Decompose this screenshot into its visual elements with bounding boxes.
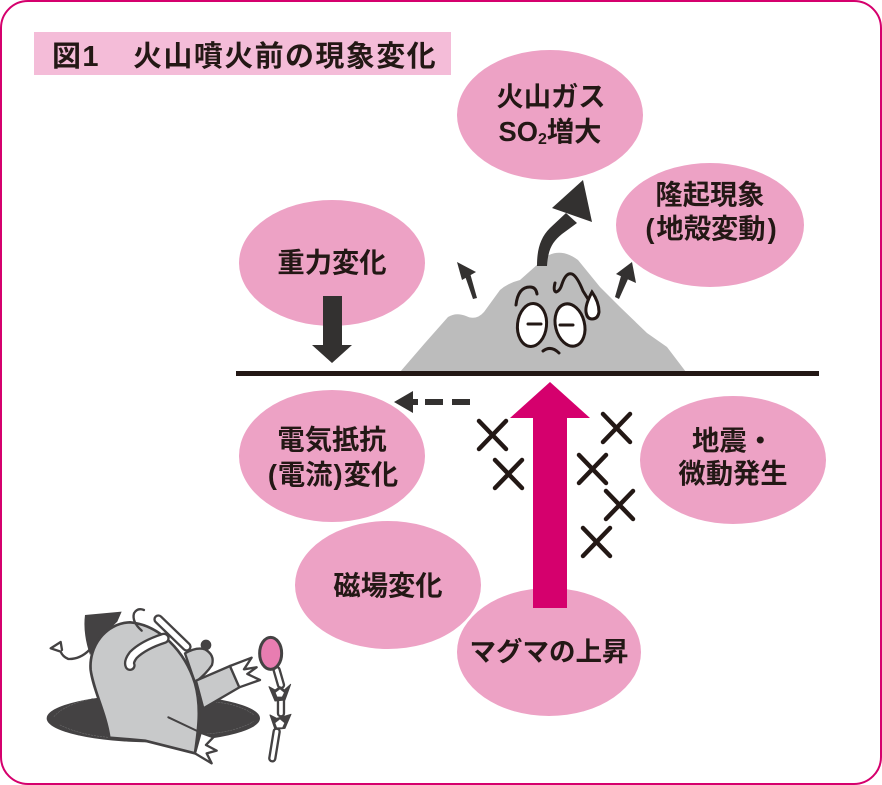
- ellipse: earthquakes: 微動発生: [678, 458, 788, 489]
- arm: [196, 666, 239, 708]
- small arrow left: [457, 262, 477, 299]
- ellipse: magma rise: [457, 588, 641, 716]
- ellipse: uplift: (地殻変動): [645, 213, 777, 244]
- ellipse: electric resistance: 電気抵抗: [277, 424, 387, 455]
- ellipse: volcanic gas: [457, 50, 643, 180]
- ellipse: volcanic gas: SO: [499, 116, 538, 147]
- ellipse: earthquakes: [640, 396, 826, 524]
- title: 図1: [52, 41, 100, 73]
- ellipse: uplift: 隆起現象: [655, 179, 765, 210]
- title: 火山噴火前の現象変化: [133, 40, 437, 73]
- ellipse: magma rise: マグマの上昇: [470, 637, 628, 667]
- ellipse: electric resistance: [239, 390, 425, 522]
- mountain with face: [400, 253, 686, 372]
- ellipse: earthquakes: 地震・: [692, 425, 774, 456]
- ellipse: gravity change: 重力変化: [277, 247, 387, 278]
- dashed arrow: [394, 391, 470, 413]
- body: [90, 622, 199, 753]
- sleeve: [130, 638, 164, 665]
- ellipse: volcanic gas: 増大: [547, 116, 601, 147]
- down arrow: [312, 296, 352, 363]
- band: [158, 619, 187, 647]
- foot: [195, 733, 217, 763]
- ground line: [236, 371, 819, 376]
- ellipse: electric resistance: (電流)変化: [268, 459, 398, 490]
- ellipse: volcanic gas: 2: [538, 131, 547, 148]
- earthquake crosses: [479, 414, 633, 556]
- leg line: [168, 717, 201, 733]
- hat and tail: [51, 612, 122, 659]
- ellipse: magnetic change: 磁場変化: [333, 570, 443, 601]
- spoon: [260, 637, 291, 758]
- hand: [230, 658, 260, 687]
- ellipse: magnetic change: [295, 521, 481, 649]
- title: [34, 32, 451, 75]
- snout: [185, 640, 213, 683]
- whisker curl: [134, 609, 144, 631]
- small arrow right: [615, 262, 636, 299]
- hole: [47, 694, 260, 742]
- ellipse: volcanic gas: 火山ガス: [496, 81, 606, 112]
- curved gas arrow: [537, 180, 592, 266]
- ellipse: gravity change: [239, 200, 425, 326]
- mole illustration: [47, 609, 291, 763]
- ellipse: uplift: [616, 163, 804, 287]
- magma arrow: [510, 382, 590, 608]
